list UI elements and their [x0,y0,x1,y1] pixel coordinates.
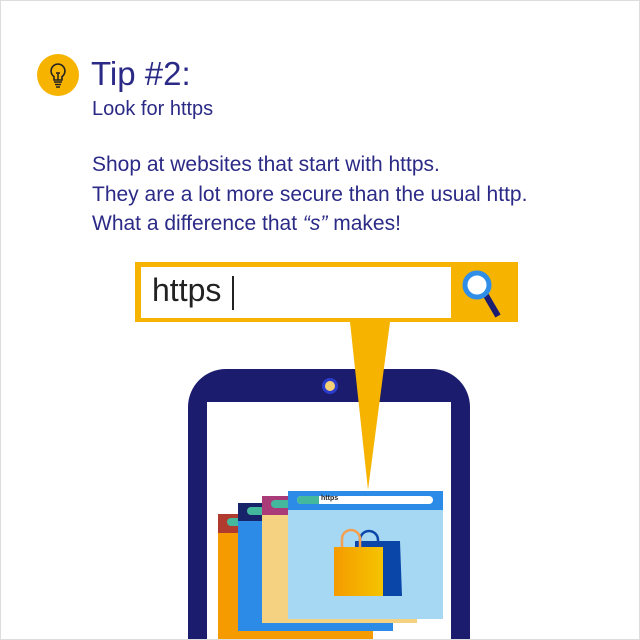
body text: Shop at websites that start with https. [92,153,440,176]
body text: They are a lot more secure than the usual http. [92,182,527,206]
title: Tip #2: [91,55,191,92]
front window with bag [288,491,443,619]
search bar [135,262,518,322]
subtitle: Look for https [92,98,213,120]
browser windows [218,514,373,639]
icon: magnifier [462,270,500,318]
front window with bag: https [321,495,338,502]
body text [92,153,527,235]
tablet [188,369,470,639]
icon: lightbulb [37,54,79,96]
pointer [350,322,390,490]
search bar: https [152,272,221,308]
body text: What a difference that “s” makes! [92,212,401,235]
